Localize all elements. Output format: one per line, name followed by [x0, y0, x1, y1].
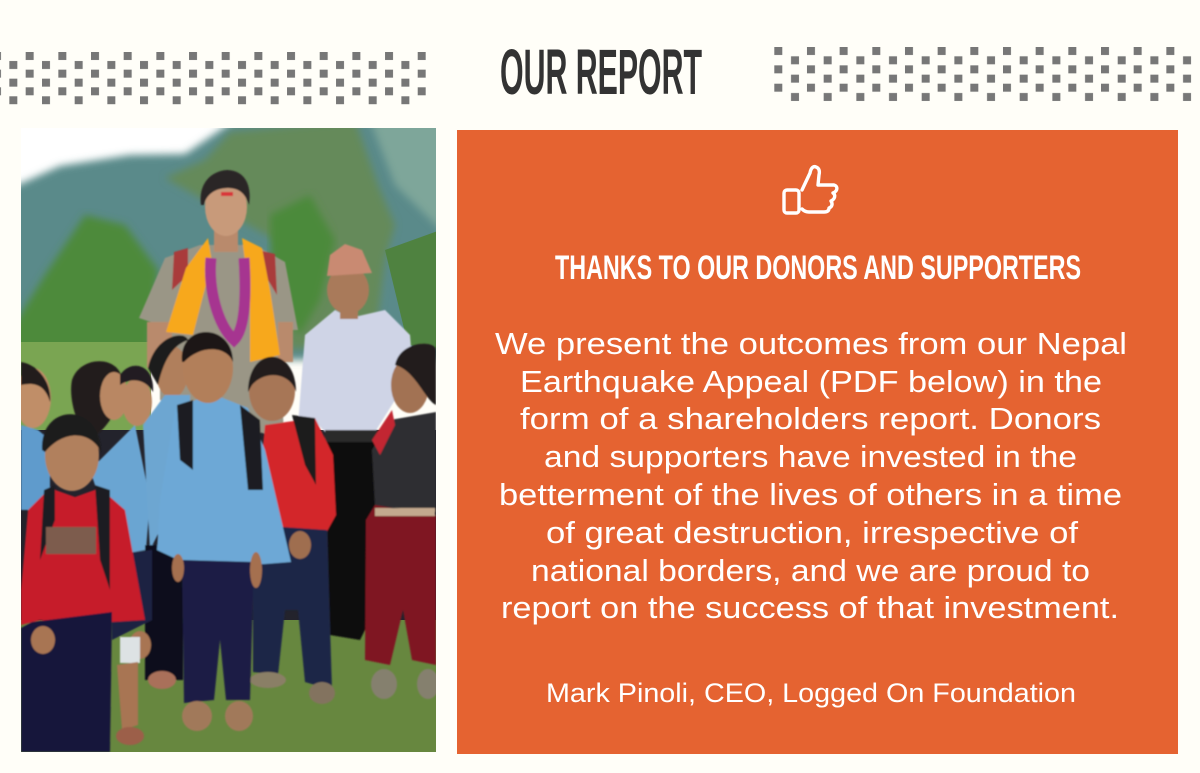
text block: message body: betterment of the lives of others in a time: [499, 477, 1122, 512]
text block: message body: [495, 326, 1127, 625]
decorative dot band left: [0, 52, 426, 104]
photo: man and schoolchildren in Nepal: [11, 120, 446, 752]
text block: message body: national borders, and we are proud to: [531, 553, 1090, 588]
left tree: [21, 212, 160, 342]
decorative dot band right: [774, 47, 1194, 101]
text block: message body: form of a shareholders report. Donors: [520, 401, 1101, 436]
grass band: [21, 342, 151, 432]
text block: message body: and supporters have invested in the: [544, 439, 1077, 474]
signature: Mark Pinoli, CEO, Logged On Foundation: [546, 678, 1076, 708]
girl and small boys: [15, 335, 190, 689]
foliage right: [385, 232, 436, 348]
upper right hillside: [370, 128, 436, 229]
text block: message body: report on the success of that investment.: [501, 590, 1119, 625]
icon: thumbs up: [784, 167, 837, 213]
man in white shirt: [298, 244, 413, 640]
boy in blue shirt centre: [157, 332, 291, 731]
background tree: [165, 120, 395, 350]
boy in red shirt front left: [21, 414, 151, 752]
boy in red shirt right of centre: [248, 357, 336, 704]
text: OUR REPORT: [500, 36, 702, 108]
text block: message body: Earthquake Appeal (PDF below) in the: [520, 364, 1102, 399]
text block: message body: of great destruction, irrespective of: [546, 515, 1078, 550]
bright tree: [270, 195, 335, 335]
mountains: [11, 120, 446, 360]
text block: message body: We present the outcomes from our Nepal: [495, 326, 1127, 361]
ground: [21, 615, 436, 752]
panel: thanks message: [457, 130, 1178, 754]
boy on right in dark shirt and maroon trousers: [365, 344, 439, 699]
man in grey shirt: [139, 170, 298, 440]
dark backing behind the group: [21, 430, 436, 620]
sky: [21, 128, 436, 228]
